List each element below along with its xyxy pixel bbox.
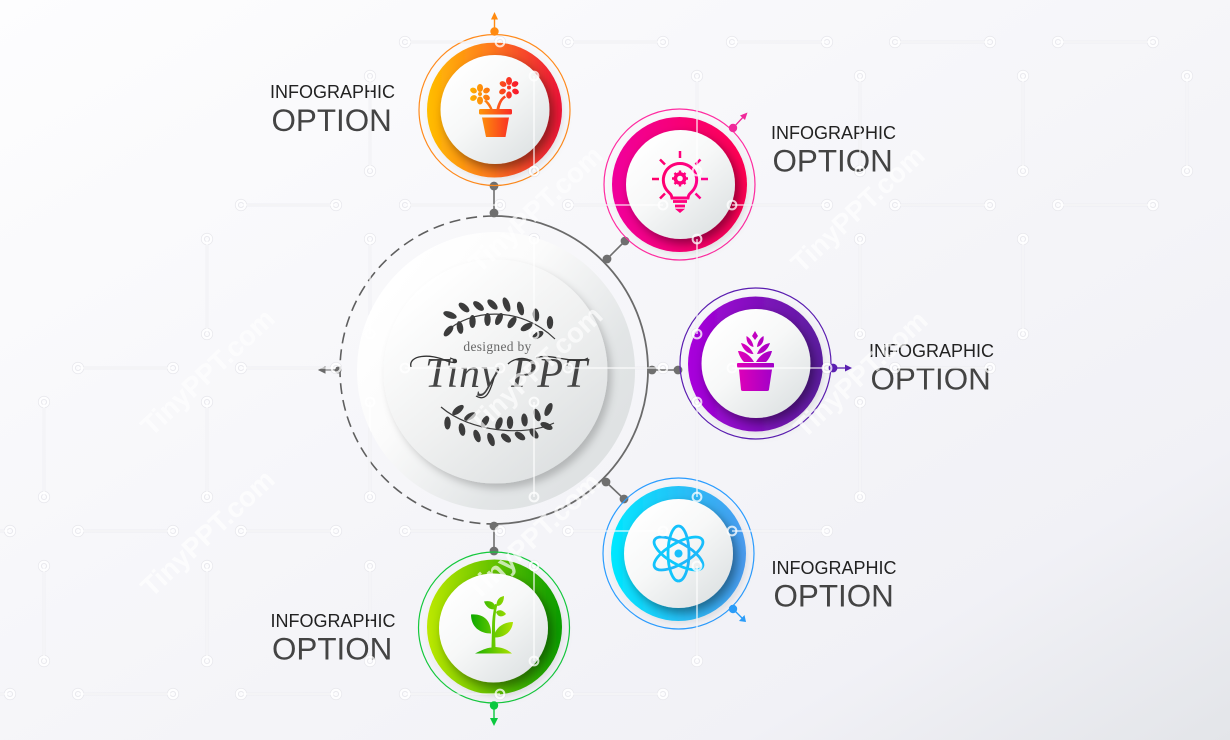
- label: option 1: [270, 82, 395, 138]
- watermarks: TinyPPT.com: [135, 303, 280, 442]
- label: option 3: OPTION: [870, 362, 991, 396]
- hub dashed arc: [340, 216, 494, 524]
- option 5 green: [418, 552, 570, 726]
- pink outer ring: [604, 109, 755, 260]
- arrow: hub left: [319, 367, 341, 373]
- label: option 1: INFOGRAPHIC: [270, 82, 395, 102]
- arrow: right: [829, 364, 852, 372]
- option 2 pink: [604, 109, 755, 260]
- option 4 cyan: [603, 478, 754, 629]
- icon: atom: [649, 526, 708, 581]
- hub outer disc: [357, 232, 635, 510]
- orange colour ring: [427, 42, 562, 178]
- watermarks: TinyPPT.com: [788, 305, 933, 444]
- label: option 2: INFOGRAPHIC: [771, 123, 896, 143]
- logo wreath top: [442, 296, 555, 341]
- logo script swashes: [411, 356, 588, 398]
- label: option 2: [771, 123, 896, 178]
- label: option 4: INFOGRAPHIC: [772, 558, 897, 578]
- green colour ring: [427, 560, 562, 694]
- connectors from hub to options: [490, 182, 682, 555]
- icon: sprout: [471, 596, 513, 654]
- watermarks: TinyPPT.com: [785, 140, 930, 279]
- purple white disc: [702, 309, 810, 418]
- logo designed by: designed by: [463, 339, 532, 354]
- label: option 5: OPTION: [272, 632, 392, 666]
- cyan white disc: [624, 499, 733, 608]
- watermarks: [135, 140, 933, 606]
- arrow: down right: [729, 605, 746, 622]
- green outer ring: [418, 552, 570, 703]
- orange white disc: [440, 55, 550, 164]
- label: option 5: INFOGRAPHIC: [270, 611, 396, 631]
- watermarks: TinyPPT.com: [135, 464, 280, 603]
- label: option 1: OPTION: [272, 103, 392, 138]
- arrow: up right: [729, 112, 748, 132]
- logo script name: Tiny PPT: [425, 351, 590, 397]
- green white disc: [439, 574, 548, 682]
- icon: light bulb: [652, 151, 708, 212]
- pink white disc: [626, 130, 735, 239]
- orange outer ring: [419, 34, 570, 186]
- label: option 2: OPTION: [772, 144, 893, 178]
- arrow: down: [490, 701, 498, 726]
- logo wreath bottom: [441, 402, 554, 447]
- cyan outer ring: [603, 478, 754, 629]
- purple colour ring: [688, 296, 823, 432]
- pink colour ring: [612, 117, 747, 252]
- option 1 orange: [419, 12, 570, 186]
- label: option 4: OPTION: [774, 578, 894, 614]
- icon: succulent: [737, 331, 774, 391]
- label: option 3: INFOGRAPHIC: [869, 341, 994, 361]
- label: option 5: [270, 611, 396, 666]
- label: option 4: [772, 558, 897, 614]
- icon: flower pot: [469, 77, 520, 137]
- central hub: [340, 216, 648, 524]
- purple outer ring: [680, 288, 831, 439]
- cyan colour ring: [611, 486, 746, 621]
- label: option 3: [869, 341, 994, 396]
- hub inner disc: [384, 260, 608, 484]
- hub solid arc: [494, 216, 648, 524]
- watermarks: TinyPPT.com: [461, 467, 606, 606]
- arrow: up: [490, 12, 499, 36]
- watermarks: TinyPPT.com: [463, 140, 608, 279]
- watermarks: TinyPPT.com: [463, 300, 608, 439]
- option 3 purple: [680, 288, 852, 439]
